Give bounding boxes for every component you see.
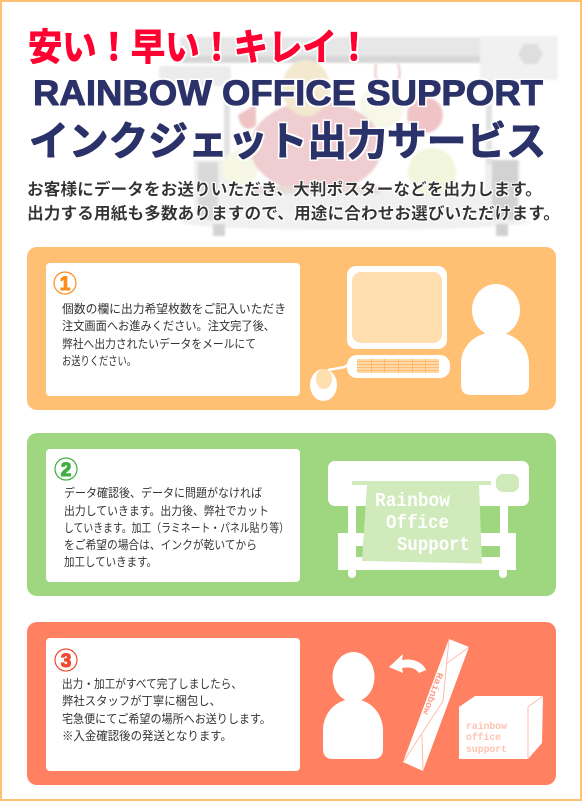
step 1 text: 個数の欄に出力希望枚数をご記入いただき bbox=[62, 301, 286, 316]
service title: インクジェット出力サービス bbox=[29, 120, 546, 164]
step 2 text: 出力していきます。出力後、弊社でカット bbox=[64, 503, 269, 518]
box text: office bbox=[466, 732, 501, 744]
printed text bbox=[375, 490, 470, 556]
badge: 3 bbox=[55, 649, 77, 672]
icon: computer bbox=[310, 266, 450, 401]
step 3 text: 宅急便にてご希望の場所へお送りします。 bbox=[62, 711, 271, 726]
icon: rolled poster tube bbox=[403, 639, 469, 771]
text card: step 3 bbox=[46, 638, 300, 771]
badge: 1 bbox=[54, 272, 76, 295]
step 3 text: 弊社スタッフが丁寧に梱包し、 bbox=[62, 693, 221, 708]
panel: step 2 bbox=[27, 433, 556, 596]
arrow bbox=[389, 654, 426, 673]
box text bbox=[466, 721, 508, 756]
panel: step 3 bbox=[27, 622, 556, 785]
icon: shipping box bbox=[459, 696, 543, 759]
step 2 text: をご希望の場合は、インクが乾いてから bbox=[64, 537, 257, 552]
step 3 text: 出力・加工がすべて完了しましたら、 bbox=[62, 676, 242, 691]
catch copy heading: 安い！早い！キレイ！ bbox=[28, 27, 371, 68]
badge: 2: 2 bbox=[61, 460, 71, 481]
brand title: RAINBOW OFFICE SUPPORT bbox=[33, 74, 543, 113]
step 2 text bbox=[64, 485, 289, 569]
icon: person bbox=[461, 284, 529, 395]
step 1 text: お送りください。 bbox=[62, 353, 136, 368]
printed text: Office bbox=[386, 512, 449, 534]
printed text: Support bbox=[397, 534, 470, 556]
printed text: Rainbow bbox=[375, 490, 451, 512]
step 1 text: 注文画面へお進みください。注文完了後、 bbox=[62, 319, 275, 333]
step 2 text: していきます。加工（ラミネート・パネル貼り等） bbox=[64, 520, 289, 535]
badge: 2 bbox=[55, 458, 77, 481]
badge: 3: 3 bbox=[61, 651, 71, 672]
step 1 text: 弊社へ出力されたいデータをメールにて bbox=[62, 336, 256, 351]
step 1 text bbox=[62, 301, 286, 368]
intro text: 出力する用紙も多数ありますので、用途に合わせお選びいただけます。 bbox=[27, 203, 560, 223]
icon: printer bbox=[328, 461, 529, 578]
panel: step 1 bbox=[27, 247, 556, 410]
box text: rainbow bbox=[466, 721, 508, 733]
intro text: お客様にデータをお送りいただき、大判ポスターなどを出力します。 bbox=[27, 179, 542, 199]
badge: 1: 1 bbox=[60, 274, 71, 295]
step 2 text: 加工していきます。 bbox=[64, 555, 157, 569]
text card: step 2 bbox=[46, 449, 300, 582]
text card: step 1 bbox=[46, 263, 300, 396]
icon: rolled poster tube: Rainbow bbox=[420, 671, 445, 716]
intro text bbox=[27, 179, 560, 223]
step 2 text: データ確認後、データに問題がなければ bbox=[64, 485, 262, 500]
icon: person bbox=[323, 652, 383, 759]
box text: support bbox=[466, 744, 507, 756]
step 3 text: ※入金確認後の発送となります。 bbox=[62, 728, 232, 743]
background photo: large format printer bbox=[159, 36, 558, 236]
step 3 text bbox=[62, 676, 271, 743]
